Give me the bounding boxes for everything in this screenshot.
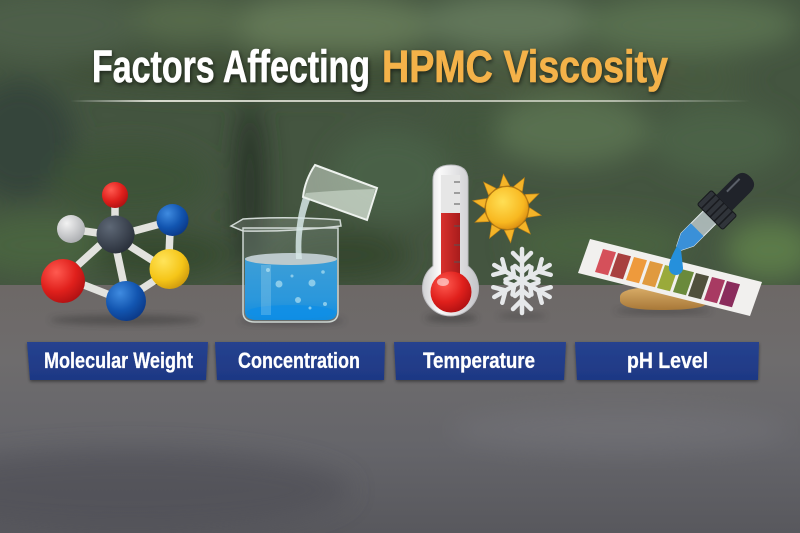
icon: sun <box>472 174 542 243</box>
label: Temperature: Temperature <box>423 348 535 373</box>
label: Molecular Weight: Molecular Weight <box>44 348 194 373</box>
beaker rim <box>231 218 341 231</box>
icon: molecule model <box>41 182 200 325</box>
icon: snowflake <box>490 249 554 319</box>
dropper glass tube <box>672 211 716 255</box>
label: Temperature <box>394 342 566 380</box>
tabletop surface <box>0 285 800 533</box>
label: Concentration <box>215 342 385 380</box>
icon: dropper <box>666 164 763 275</box>
title: HPMC Viscosity <box>382 41 668 92</box>
water stream <box>296 197 310 259</box>
label: pH Level <box>575 342 759 380</box>
icon: beaker with blue liquid and pouring glass <box>231 165 377 325</box>
blue drop <box>669 246 683 275</box>
blue liquid in tube <box>672 223 704 255</box>
title: Factors Affecting <box>92 41 370 92</box>
blurred forest background <box>0 0 800 290</box>
pouring glass <box>303 165 377 220</box>
icon: thermometer <box>423 165 478 322</box>
beaker glass body <box>243 228 338 322</box>
dropper bulb <box>716 169 758 211</box>
title <box>92 41 668 92</box>
icon: wooden disk under pH strip <box>615 287 711 314</box>
label: Concentration: Concentration <box>238 348 360 373</box>
icon: pH test strip <box>578 239 762 316</box>
dropper collar <box>697 190 737 230</box>
label: pH Level: pH Level <box>627 348 708 373</box>
title underline <box>70 100 750 102</box>
blue liquid <box>245 254 337 320</box>
label: Molecular Weight <box>27 342 208 380</box>
